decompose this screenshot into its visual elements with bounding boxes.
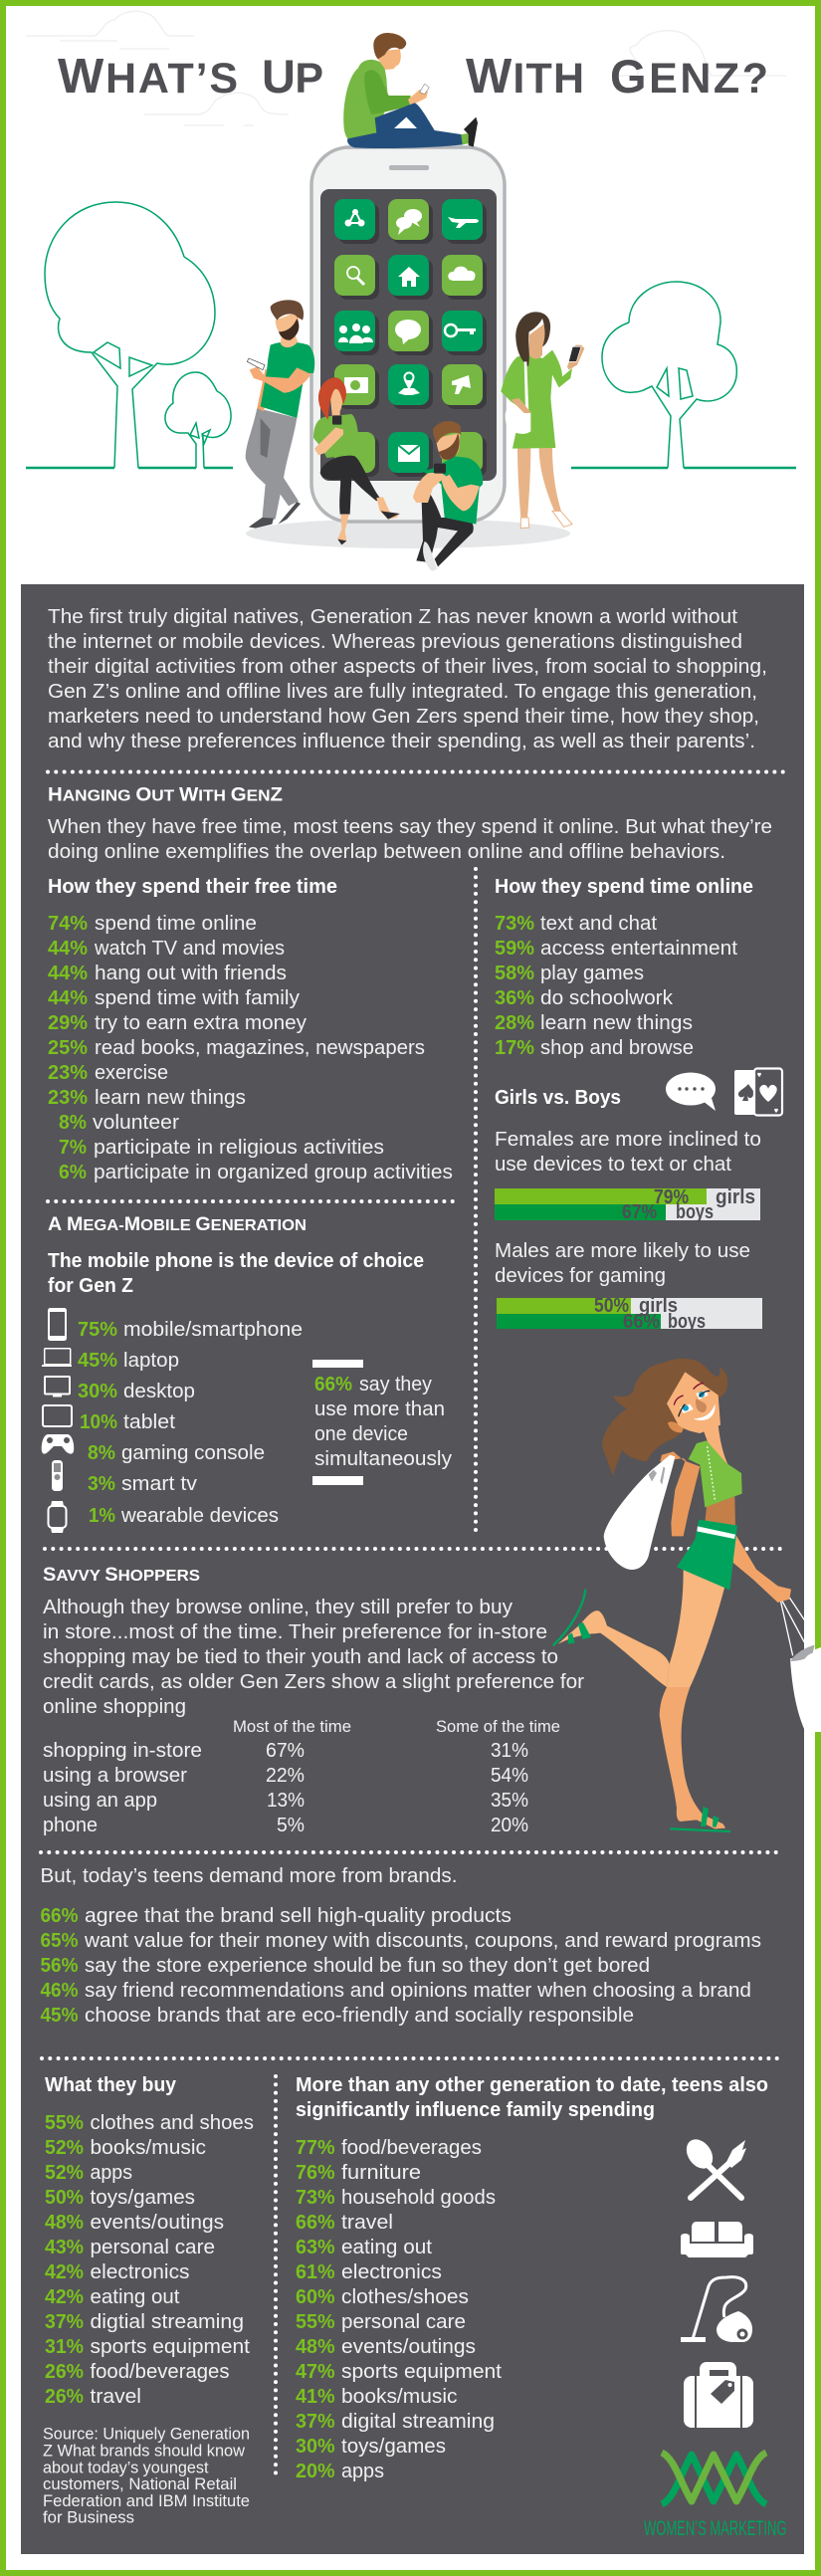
person: woman with red hair <box>313 377 400 544</box>
list: brand demands: 45% <box>40 2004 78 2027</box>
hanging out intro text <box>48 815 772 863</box>
list: family spending influence: 47% <box>296 2360 334 2383</box>
list: family spending influence: 48% <box>296 2335 334 2358</box>
list: how they spend their free time: 74% <box>48 912 88 935</box>
list: how they spend their free time: 6% <box>59 1161 87 1183</box>
callout: multiple devices: one device <box>314 1422 408 1445</box>
intro paragraph: the internet or mobile devices. Whereas previous generations distinguished <box>48 630 742 653</box>
person: standing man with beard <box>246 300 314 529</box>
list: how they spend their free time <box>48 875 453 1183</box>
list: how they spend their free time: participate in religious activities <box>94 1136 384 1159</box>
list: family spending influence: travel <box>341 2211 393 2234</box>
list: family spending influence: 77% <box>296 2136 334 2159</box>
list: what they buy: travel <box>90 2385 141 2408</box>
list: how they spend time online: shop and browse <box>540 1036 694 1059</box>
list: how they spend their free time: 44% <box>48 986 88 1009</box>
bar chart: text and chat: girls <box>716 1186 755 1208</box>
list: family spending influence: sports equipment <box>341 2360 502 2383</box>
table: shopping preferences: phone <box>43 1814 98 1836</box>
list: family spending influence: significantly influence family spending <box>296 2098 655 2121</box>
table: shopping preferences: 31% <box>491 1739 528 1762</box>
heading: Savvy Shoppers: SAVVY SHOPPERS <box>43 1565 200 1586</box>
list: family spending influence: eating out <box>341 2236 432 2258</box>
person: standing woman <box>501 312 584 529</box>
text: females more inclined: use devices to text or chat <box>495 1153 731 1176</box>
heading: A Mega-Mobile Generation: A MEGA-MOBILE GENERATION <box>48 1214 307 1235</box>
list: devices: gaming console <box>121 1441 265 1464</box>
bar chart: gaming <box>497 1295 762 1333</box>
table: shopping preferences <box>43 1717 560 1836</box>
list: brand demands <box>40 1904 761 2027</box>
illustration: shopping girl <box>553 1359 821 1831</box>
hanging out intro text: doing online exemplifies the overlap between online and offline behaviors. <box>48 840 725 863</box>
left big tree <box>45 202 231 468</box>
list: what they buy: 37% <box>45 2310 84 2333</box>
list: brand demands: say the store experience should be fun so they don’t get bored <box>85 1954 650 1977</box>
list: family spending influence: 60% <box>296 2285 334 2308</box>
list: devices: 45% <box>78 1349 117 1372</box>
list: what they buy: 52% <box>45 2136 84 2159</box>
list: how they spend their free time: spend time online <box>95 912 257 935</box>
list: how they spend their free time: participate in organized group activities <box>94 1161 453 1183</box>
icon glyphs <box>338 209 479 462</box>
icon: sofa <box>681 2222 753 2257</box>
subheading: device of choice: The mobile phone is the device of choice <box>48 1249 424 1272</box>
list: devices: mobile/smartphone <box>123 1318 303 1341</box>
list: how they spend time online: How they spend time online <box>495 875 753 898</box>
savvy shoppers paragraph: in store...most of the time. Their preference for in-store <box>43 1620 547 1643</box>
text: males more likely: devices for gaming <box>495 1264 666 1287</box>
list: family spending influence: 41% <box>296 2385 334 2408</box>
icon: smartphone <box>48 1308 67 1341</box>
list: how they spend their free time: hang out with friends <box>95 962 287 984</box>
savvy shoppers paragraph: Although they browse online, they still prefer to buy <box>43 1596 513 1618</box>
hanging out intro text: When they have free time, most teens say they spend it online. But what they’re <box>48 815 772 838</box>
list: what they buy: What they buy <box>45 2073 177 2096</box>
person: sitting on phone <box>343 33 478 148</box>
list: what they buy: toys/games <box>90 2186 195 2209</box>
list: how they spend time online <box>495 875 753 1059</box>
list: what they buy: 50% <box>45 2186 84 2209</box>
heading: Hanging Out With GenZ: HANGING OUT WITH GENZ <box>48 784 283 806</box>
list: family spending influence: electronics <box>341 2260 442 2283</box>
bar chart: text and chat <box>495 1186 760 1223</box>
list: brand demands: say friend recommendations and opinions matter when choosing a brand <box>85 1979 751 2002</box>
list: devices: 3% <box>88 1472 115 1495</box>
title: WHAT’S <box>58 50 238 104</box>
dark content panel <box>21 584 804 2554</box>
table: shopping preferences: 54% <box>491 1764 528 1787</box>
list: how they spend their free time: watch TV and movies <box>94 937 285 960</box>
list: how they spend their free time: read books, magazines, newspapers <box>95 1036 425 1059</box>
savvy shoppers paragraph: shopping may be tied to their youth and lack of access to <box>43 1645 558 1668</box>
list: what they buy: digtial streaming <box>90 2310 244 2333</box>
icon: playing cards <box>734 1069 782 1115</box>
list: how they spend time online: play games <box>540 962 644 984</box>
icon: laptop <box>42 1349 72 1367</box>
table: shopping preferences: shopping in-store <box>43 1739 202 1762</box>
list: brand demands: choose brands that are eco-friendly and socially responsible <box>85 2004 634 2027</box>
callout: multiple devices: simultaneously <box>314 1447 453 1470</box>
list: devices: 1% <box>89 1504 115 1527</box>
list: family spending influence: books/music <box>341 2385 458 2408</box>
list: how they spend their free time: spend time with family <box>95 986 301 1009</box>
intro paragraph: Gen Z’s online and offline lives are fully integrated. To engage this generation, <box>48 680 757 703</box>
table: shopping preferences: Some of the time <box>436 1717 560 1736</box>
list: what they buy: 31% <box>45 2335 84 2358</box>
list: family spending influence: More than any other generation to date, teens also <box>296 2073 768 2096</box>
list: how they spend their free time: 8% <box>59 1111 87 1134</box>
icon: speech bubble <box>666 1073 716 1111</box>
table: shopping preferences: using a browser <box>43 1764 187 1787</box>
list: family spending influence: events/outings <box>341 2335 476 2358</box>
list: family spending influence: 63% <box>296 2236 334 2258</box>
source note: Federation and IBM Institute <box>43 2491 250 2510</box>
list: what they buy: eating out <box>90 2285 180 2308</box>
list: what they buy: apps <box>90 2161 132 2184</box>
subheading: device of choice <box>48 1249 424 1297</box>
callout: multiple devices: use more than <box>314 1397 445 1420</box>
list: family spending influence: 66% <box>296 2211 334 2234</box>
list: family spending influence <box>296 2073 768 2482</box>
table: shopping preferences: 13% <box>267 1789 305 1812</box>
person: seated man <box>413 421 483 571</box>
source note: Z What brands should know <box>43 2441 246 2461</box>
list: what they buy: 48% <box>45 2211 84 2234</box>
list: family spending influence: 76% <box>296 2161 334 2184</box>
list: devices: tablet <box>123 1410 175 1433</box>
list: devices: desktop <box>123 1380 195 1402</box>
table: shopping preferences: using an app <box>43 1789 157 1812</box>
list: how they spend time online: 36% <box>495 986 534 1009</box>
list: how they spend their free time: try to earn extra money <box>95 1011 308 1034</box>
right tree <box>602 282 736 468</box>
list: brand demands: want value for their money with discounts, coupons, and reward programs <box>84 1929 761 1952</box>
title: WITH <box>466 50 584 104</box>
list: family spending influence: digital streaming <box>341 2410 495 2433</box>
list: what they buy: electronics <box>90 2260 189 2283</box>
table: shopping preferences: 67% <box>266 1739 305 1762</box>
bar chart: text and chat: 79% <box>654 1186 689 1208</box>
list: brand demands: 46% <box>40 1979 78 2002</box>
source note: about today’s youngest <box>43 2459 209 2476</box>
list: how they spend their free time: How they spend their free time <box>48 875 337 898</box>
list: how they spend time online: learn new things <box>540 1011 693 1034</box>
source note: Source: Uniquely Generation <box>43 2425 250 2443</box>
list: how they spend time online: 28% <box>495 1011 534 1034</box>
intro paragraph: their digital activities from other aspects of their lives, from social to shopping, <box>48 655 767 678</box>
icon: spoon and fork <box>681 2134 746 2198</box>
text: females more inclined <box>495 1128 761 1176</box>
shopping bag over right border <box>804 1652 821 1730</box>
list: how they spend time online: do schoolwork <box>540 986 674 1009</box>
bar chart: gaming: 66% <box>623 1311 660 1333</box>
savvy shoppers paragraph <box>43 1596 584 1718</box>
callout: multiple devices <box>312 1360 453 1485</box>
callout: multiple devices: 66% <box>314 1373 352 1395</box>
icon: luggage with tag <box>684 2362 753 2428</box>
device icons <box>42 1308 74 1533</box>
list: family spending influence: 61% <box>296 2260 334 2283</box>
list: how they spend their free time: learn new things <box>95 1086 246 1109</box>
title <box>58 50 768 104</box>
app icons <box>334 199 487 477</box>
table: shopping preferences: 22% <box>266 1764 305 1787</box>
list: family spending influence: personal care <box>341 2310 466 2333</box>
list: family spending influence: 37% <box>296 2410 334 2433</box>
list: how they spend time online: 59% <box>495 937 534 960</box>
intro paragraph: marketers need to understand how Gen Zers spend their time, how they shop, <box>48 705 759 728</box>
text: females more inclined: Females are more inclined to <box>495 1128 761 1151</box>
icon: tablet <box>43 1405 72 1426</box>
list: family spending influence: 30% <box>296 2435 334 2458</box>
list: what they buy: personal care <box>90 2236 215 2258</box>
list: devices: 10% <box>80 1410 117 1433</box>
list: devices: laptop <box>123 1349 179 1372</box>
table: shopping preferences: 5% <box>277 1814 305 1836</box>
list: how they spend time online: 58% <box>495 962 534 984</box>
list: devices: 8% <box>88 1441 115 1464</box>
list: how they spend their free time: 44% <box>48 937 88 960</box>
source note: customers, National Retail <box>43 2474 237 2493</box>
bar chart: text and chat: 67% <box>622 1201 657 1223</box>
list: devices: 30% <box>78 1380 117 1402</box>
list: what they buy: 26% <box>45 2385 84 2408</box>
list: what they buy: food/beverages <box>90 2360 229 2383</box>
list: how they spend time online: 73% <box>495 912 534 935</box>
source note: for Business <box>43 2508 134 2526</box>
bar chart: gaming: 50% <box>594 1295 629 1317</box>
list: family spending influence: food/beverages <box>341 2136 482 2159</box>
logo: Women's Marketing <box>644 2453 786 2540</box>
ground lines <box>26 467 796 469</box>
list: how they spend their free time: volunteer <box>93 1111 179 1134</box>
list: what they buy: 52% <box>45 2161 84 2184</box>
list: devices: smart tv <box>121 1472 198 1495</box>
list: family spending influence: 73% <box>296 2186 334 2209</box>
list: what they buy: 43% <box>45 2236 84 2258</box>
bar chart: gaming: boys <box>668 1311 706 1333</box>
intro paragraph: The first truly digital natives, Generation Z has never known a world without <box>48 605 737 628</box>
intro paragraph: and why these preferences influence their spending, as well as their parents’. <box>48 730 755 752</box>
list: devices: wearable devices <box>120 1504 279 1527</box>
title: UP <box>262 50 323 103</box>
list: how they spend their free time: exercise <box>95 1061 168 1084</box>
list: family spending influence: toys/games <box>341 2435 446 2458</box>
list: what they buy: 42% <box>45 2285 84 2308</box>
list: what they buy: clothes and shoes <box>90 2111 254 2134</box>
icon: watch <box>48 1501 66 1533</box>
source note <box>43 2425 250 2526</box>
list: family spending influence: 55% <box>296 2310 334 2333</box>
list: how they spend their free time: 25% <box>48 1036 88 1059</box>
list: family spending influence: household goods <box>341 2186 496 2209</box>
text: demand more from brands: But, today’s teens demand more from brands. <box>40 1864 458 1887</box>
savvy shoppers paragraph: credit cards, as older Gen Zers show a slight preference for <box>43 1670 584 1693</box>
icon: gamepad <box>42 1434 74 1454</box>
list: family spending influence: 20% <box>296 2460 334 2482</box>
list: how they spend their free time: 29% <box>48 1011 88 1034</box>
list: what they buy: 55% <box>45 2111 84 2134</box>
list: family spending influence: clothes/shoes <box>341 2285 469 2308</box>
list: how they spend their free time: 23% <box>48 1086 88 1109</box>
text: males more likely: Males are more likely to use <box>495 1239 750 1262</box>
list: what they buy <box>45 2073 254 2408</box>
subheading: device of choice: for Gen Z <box>48 1274 133 1297</box>
list: family spending influence: furniture <box>341 2161 421 2184</box>
phone body <box>311 147 505 522</box>
table: shopping preferences: Most of the time <box>233 1717 351 1736</box>
list: what they buy: books/music <box>90 2136 206 2159</box>
list: how they spend time online: text and chat <box>540 912 657 935</box>
list: what they buy: events/outings <box>90 2211 224 2234</box>
intro paragraph <box>48 605 767 752</box>
list: how they spend time online: access entertainment <box>540 937 737 960</box>
list: family spending influence: apps <box>341 2460 384 2482</box>
list: how they spend their free time: 23% <box>48 1061 88 1084</box>
list: brand demands: 56% <box>40 1954 78 1977</box>
list: how they spend time online: 17% <box>495 1036 534 1059</box>
list: brand demands: 65% <box>40 1929 78 1952</box>
bar chart: gaming: girls <box>639 1295 678 1317</box>
list: what they buy: 42% <box>45 2260 84 2283</box>
savvy shoppers paragraph: online shopping <box>43 1695 186 1718</box>
list: devices <box>78 1318 303 1527</box>
list: brand demands: agree that the brand sell high-quality products <box>85 1904 512 1927</box>
list: what they buy: 26% <box>45 2360 84 2383</box>
icon: vacuum cleaner <box>681 2277 752 2342</box>
table: shopping preferences: 35% <box>491 1789 528 1812</box>
icon: desktop <box>45 1377 70 1397</box>
table: shopping preferences: 20% <box>491 1814 528 1836</box>
icon: remote <box>52 1460 63 1491</box>
callout: multiple devices: say they <box>359 1373 433 1395</box>
illustration: phone with people <box>246 33 584 571</box>
list: how they spend their free time: 44% <box>48 962 88 984</box>
bar chart: text and chat: boys <box>676 1201 714 1223</box>
heading: Girls vs. Boys: Girls vs. Boys <box>495 1086 621 1109</box>
phone screen <box>320 189 497 481</box>
list: how they spend their free time: 7% <box>59 1136 87 1159</box>
list: brand demands: 66% <box>40 1904 78 1927</box>
title: GENZ? <box>610 50 768 103</box>
text: males more likely <box>495 1239 750 1287</box>
list: devices: 75% <box>78 1318 117 1341</box>
list: what they buy: sports equipment <box>90 2335 250 2358</box>
